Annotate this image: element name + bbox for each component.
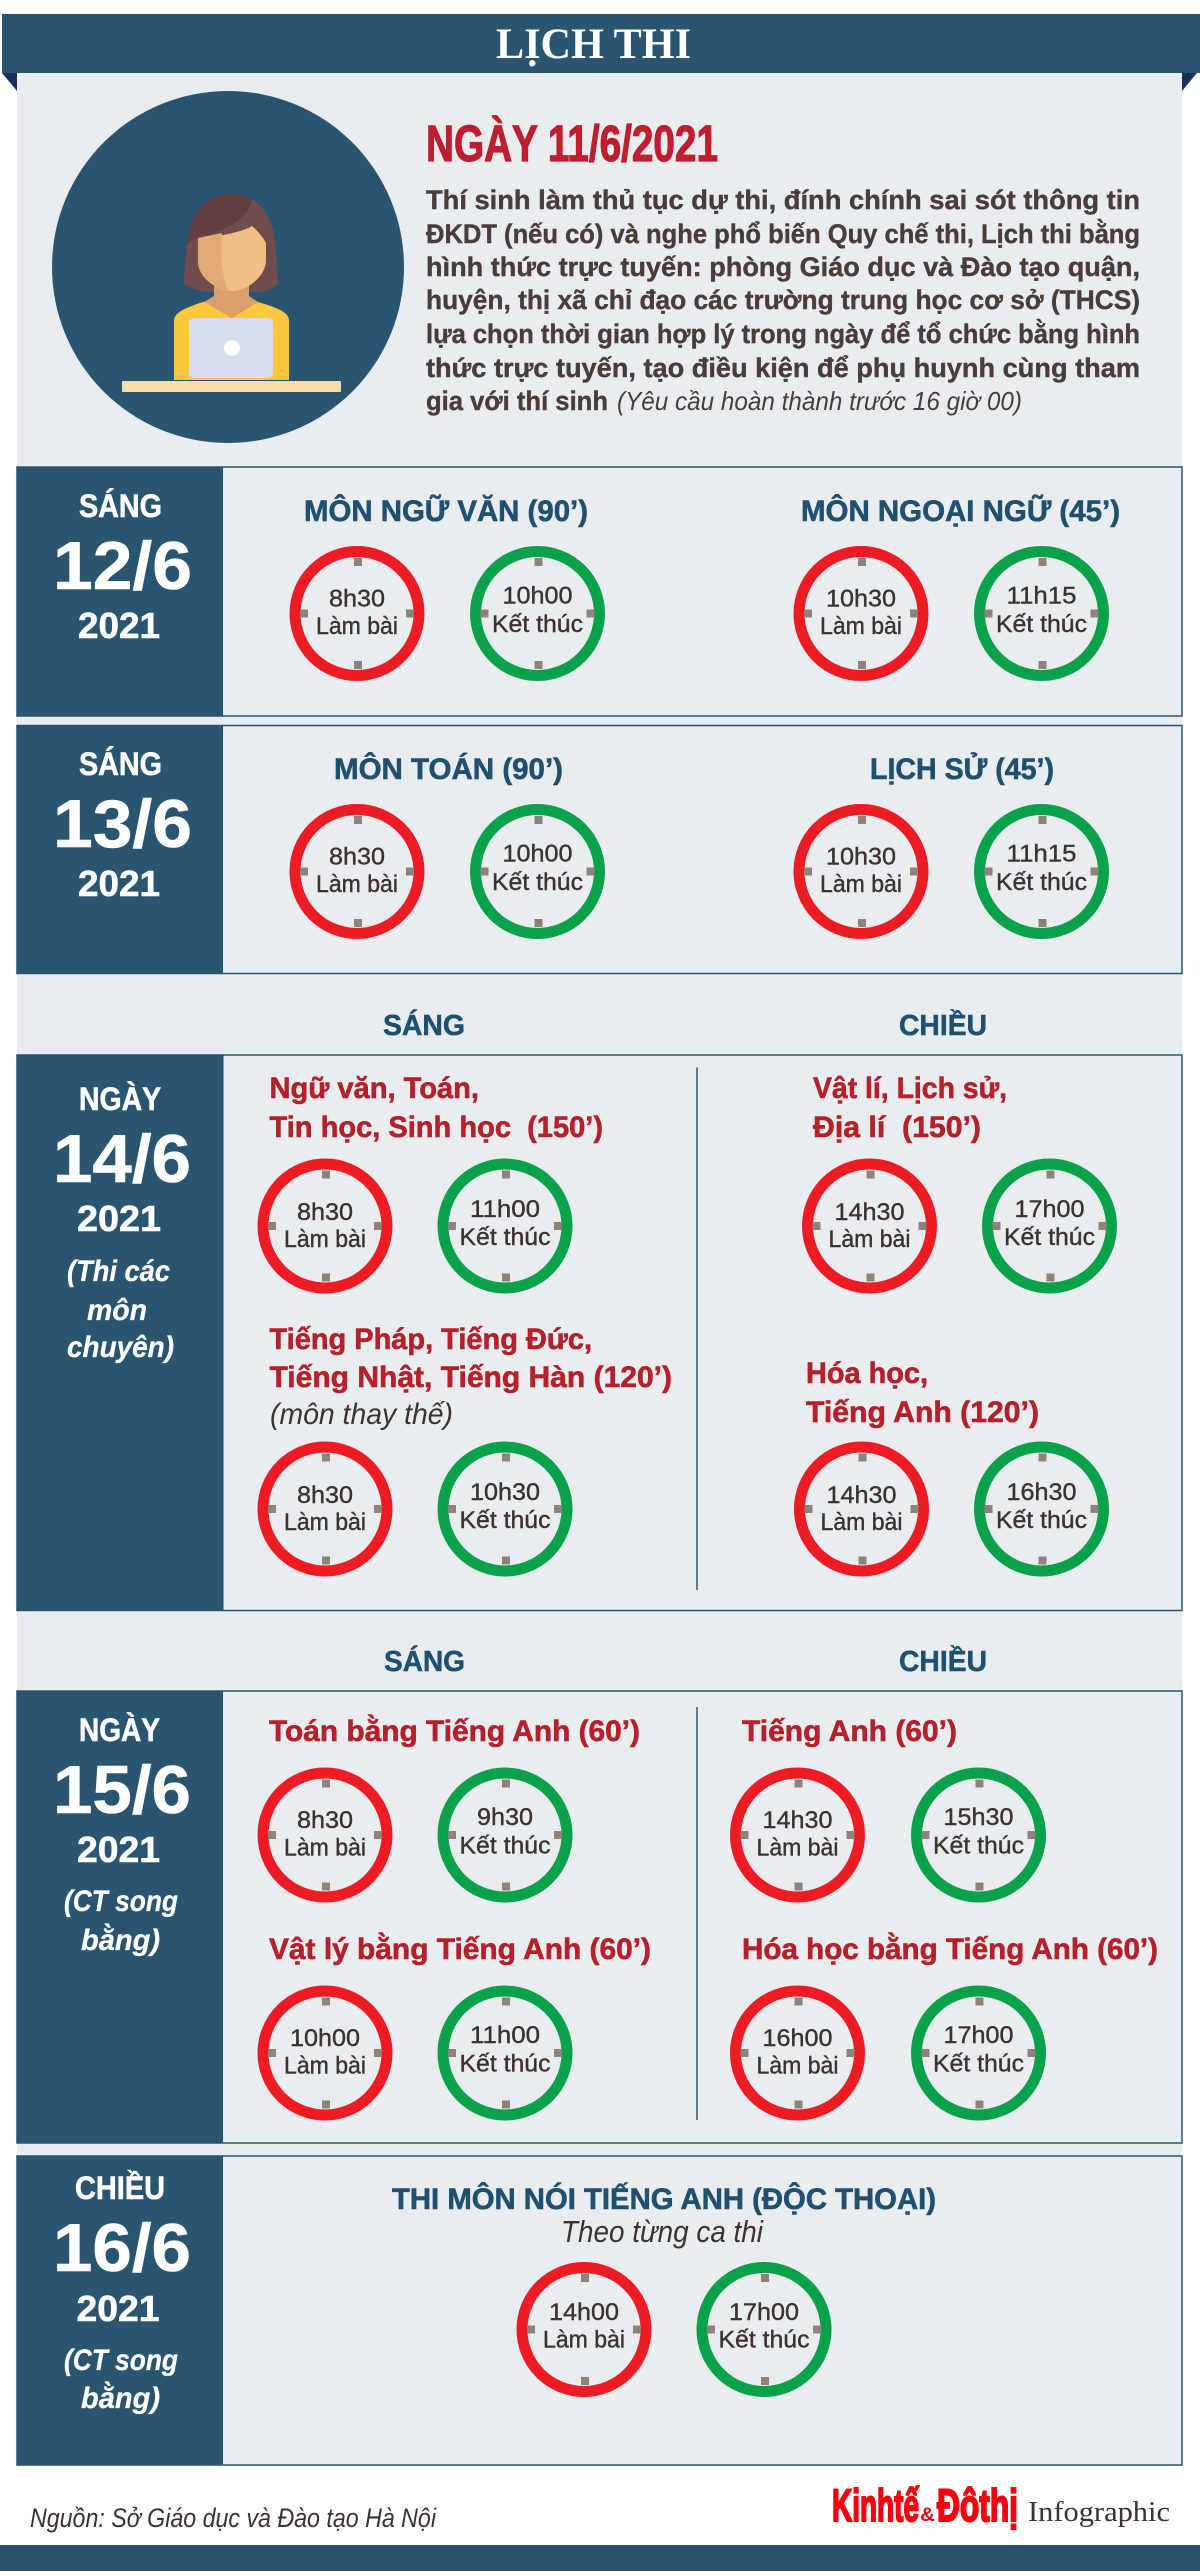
date block 15/6 [53, 1712, 191, 1957]
clock: end 10h30: 10h30 [470, 1479, 540, 1506]
logo: Kinhtế [832, 2480, 920, 2531]
clock: start 14h30: Làm bài [828, 1226, 910, 1253]
subject heading: Ngữ văn, Toán, [270, 1072, 479, 1105]
title banner: LỊCH THI [496, 21, 691, 68]
clock: start 10h30 [799, 552, 923, 676]
clock: end 11h00: Kết thúc [460, 2050, 550, 2078]
clock: end 15h30 [916, 1773, 1040, 1897]
clock: start 8h30 [295, 552, 419, 676]
date block 14/6: 2021 [77, 1198, 161, 1239]
clock: end 17h00: 17h00 [1014, 1196, 1084, 1223]
subject heading: Hóa học, [806, 1357, 928, 1390]
clock: start 10h30: Làm bài [820, 871, 902, 898]
clock: start 14h00 [522, 2268, 646, 2392]
clock: start 10h30: 10h30 [826, 586, 896, 612]
clock: end 17h00: Kết thúc [718, 2326, 810, 2354]
date block 14/6: (Thi các [67, 1255, 170, 1288]
subject heading: Vật lý bằng Tiếng Anh (60’) [269, 1932, 651, 1966]
intro paragraph: thức trực tuyến, tạo điều kiện để phụ huynh cùng tham [426, 353, 1140, 383]
clock: end 10h00: 10h00 [502, 840, 572, 868]
logo: Đôthị [937, 2480, 1018, 2531]
clock: start 8h30: 8h30 [297, 1199, 353, 1226]
date block 15/6: NGÀY [79, 1712, 160, 1748]
section label: afternoon: CHIỀU [899, 1008, 987, 1042]
clock: start 8h30: 8h30 [297, 1482, 353, 1509]
clock: start 14h30: Làm bài [820, 1509, 902, 1536]
clock: start 8h30: Làm bài [284, 1226, 366, 1253]
clock: start 8h30 [295, 810, 419, 934]
subject heading: Tiếng Pháp, Tiếng Đức, [270, 1323, 592, 1356]
intro paragraph: hình thức trực tuyến: phòng Giáo dục và Đào tạo quận, [426, 252, 1140, 282]
clock: start 14h30: 14h30 [826, 1482, 896, 1509]
footer band [0, 2545, 1200, 2571]
date block 14/6: môn [87, 1294, 147, 1327]
date block 15/6: (CT song [64, 1885, 178, 1918]
logo: & [920, 2505, 935, 2526]
panel: 13/6 [17, 726, 1182, 974]
intro paragraph: (Yêu cầu hoàn thành trước 16 giờ 00) [617, 386, 1022, 416]
intro paragraph: ĐKDT (nếu có) và nghe phổ biến Quy chế thi, Lịch thi bằng [426, 218, 1140, 249]
panel: 12/6 [17, 467, 1182, 716]
clock: end 11h00: 11h00 [470, 2022, 540, 2049]
clock: start 8h30: 8h30 [329, 844, 385, 870]
clock: end 17h00 [988, 1164, 1112, 1288]
date block 16/6: CHIỀU [75, 2170, 165, 2206]
clock: end 17h00: Kết thúc [1004, 1224, 1095, 1251]
clock: start 10h00: 10h00 [290, 2025, 360, 2052]
date block 12/6: 2021 [78, 605, 160, 646]
clock: start 14h30 [808, 1164, 932, 1288]
date block 16/6 [53, 2170, 191, 2415]
clock: end 17h00: 17h00 [729, 2299, 799, 2326]
date block 16/6: 16/6 [53, 2210, 191, 2286]
clock: start 16h00: Làm bài [756, 2052, 838, 2080]
logo [832, 2480, 1170, 2531]
clock: start 8h30: 8h30 [329, 586, 385, 612]
subject heading: LỊCH SỬ (45’) [870, 752, 1054, 786]
clock: start 8h30 [263, 1447, 387, 1571]
date block 12/6: 12/6 [53, 528, 192, 604]
section label: morning: SÁNG [383, 1008, 465, 1042]
clock: start 10h30: 10h30 [826, 844, 896, 870]
clock: start 14h30: 14h30 [762, 1807, 832, 1834]
clock: end 11h15 [980, 552, 1104, 676]
clock: end 11h00 [443, 1164, 567, 1288]
clock: end 15h30: 15h30 [944, 1804, 1014, 1831]
clock: start 8h30 [263, 1164, 387, 1288]
date block 13/6: SÁNG [79, 746, 162, 782]
subject heading [813, 1072, 1007, 1144]
subject heading: MÔN NGỮ VĂN (90’) [304, 494, 588, 528]
clock: end 11h15 [980, 810, 1104, 934]
date block 12/6: SÁNG [79, 488, 162, 524]
subject heading [270, 1072, 603, 1144]
source note: Nguồn: Sở Giáo dục và Đào tạo Hà Nội [30, 2503, 437, 2533]
clock: end 17h00: Kết thúc [933, 2050, 1024, 2078]
date block 14/6: chuyên) [67, 1331, 174, 1364]
panel: 15/6 [17, 1691, 1182, 2143]
clock: end 11h15: 11h15 [1006, 582, 1076, 610]
clock: end 16h30 [980, 1447, 1104, 1571]
date block 14/6 [53, 1081, 191, 1364]
date block 15/6: 15/6 [53, 1752, 191, 1828]
clock: start 8h30: Làm bài [316, 871, 398, 898]
clock: end 9h30 [443, 1773, 567, 1897]
title banner [2, 14, 1200, 91]
subject heading: Vật lí, Lịch sử, [813, 1072, 1007, 1105]
clock: end 11h15: Kết thúc [996, 869, 1087, 896]
date block 15/6: bằng) [81, 1923, 160, 1957]
clock: end 16h30: 16h30 [1006, 1479, 1076, 1506]
subject heading: Địa lí (150’) [813, 1111, 981, 1144]
clock: end 11h00 [443, 1991, 567, 2115]
subject heading: Tiếng Anh (60’) [742, 1715, 957, 1748]
date block 13/6 [53, 746, 192, 904]
date block 14/6: NGÀY [79, 1081, 161, 1117]
clock: start 10h30 [799, 810, 923, 934]
panel: 14/6 [17, 1055, 1182, 1610]
clock: end 10h00: Kết thúc [492, 611, 583, 638]
panel: 16/6 [17, 2156, 1182, 2465]
clock: end 11h00: 11h00 [470, 1196, 540, 1223]
clock: start 8h30 [263, 1773, 387, 1897]
heading: date 11/6/2021: NGÀY 11/6/2021 [426, 115, 718, 172]
subject heading: Toán bằng Tiếng Anh (60’) [269, 1714, 640, 1748]
clock: start 10h00 [263, 1991, 387, 2115]
clock: end 17h00 [916, 1991, 1040, 2115]
date block 13/6: 2021 [78, 863, 160, 904]
clock: end 11h15: 11h15 [1006, 840, 1076, 868]
clock: start 14h30 [800, 1447, 924, 1571]
subject heading: Tin học, Sinh học (150’) [270, 1111, 603, 1144]
clock: start 14h30: 14h30 [834, 1199, 904, 1226]
clock: start 8h30: 8h30 [297, 1807, 353, 1834]
intro paragraph: lựa chọn thời gian hợp lý trong ngày để tổ chức bằng hình [426, 318, 1140, 349]
subject heading: Tiếng Anh (120’) [806, 1396, 1039, 1429]
icon: student at laptop [52, 91, 404, 443]
clock: start 8h30: Làm bài [316, 613, 398, 640]
clock: end 10h30 [443, 1447, 567, 1571]
clock: start 14h00: 14h00 [549, 2299, 619, 2326]
clock: start 8h30: Làm bài [284, 1509, 366, 1536]
subject heading: MÔN TOÁN (90’) [334, 752, 563, 786]
subject heading: MÔN NGOẠI NGỮ (45’) [801, 494, 1120, 528]
clock: start 10h30: Làm bài [820, 613, 902, 640]
subject heading [270, 1323, 672, 1431]
clock: start 10h00: Làm bài [284, 2052, 366, 2080]
intro paragraph [426, 185, 1140, 416]
subject heading: Tiếng Nhật, Tiếng Hàn (120’) [270, 1361, 672, 1394]
clock: end 16h30: Kết thúc [996, 1507, 1087, 1534]
clock: end 10h30: Kết thúc [460, 1507, 550, 1534]
clock: start 14h00: Làm bài [543, 2326, 625, 2354]
date block 16/6: 2021 [76, 2288, 160, 2329]
subject heading [806, 1357, 1039, 1429]
clock: end 10h00: 10h00 [502, 582, 572, 610]
clock: start 14h30: Làm bài [756, 1834, 838, 1862]
subtitle: Theo từng ca thi [561, 2214, 764, 2249]
clock: end 15h30: Kết thúc [933, 1832, 1024, 1860]
section label: morning: SÁNG [384, 1644, 465, 1678]
subject heading: (môn thay thế) [270, 1398, 453, 1431]
clock: end 10h00 [476, 810, 600, 934]
date block 16/6: (CT song [64, 2344, 178, 2377]
clock: end 9h30: 9h30 [477, 1804, 533, 1831]
intro paragraph: gia với thí sinh [426, 386, 608, 416]
clock: end 11h15: Kết thúc [996, 611, 1087, 638]
intro paragraph: huyện, thị xã chỉ đạo các trường trung học cơ sở (THCS) [426, 285, 1140, 315]
subject heading: Hóa học bằng Tiếng Anh (60’) [742, 1932, 1158, 1966]
clock: start 14h30 [736, 1773, 860, 1897]
date block 12/6 [53, 488, 192, 646]
clock: start 8h30: Làm bài [284, 1834, 366, 1862]
clock: end 17h00: 17h00 [944, 2022, 1014, 2049]
clock: end 10h00: Kết thúc [492, 869, 583, 896]
subject heading: THI MÔN NÓI TIẾNG ANH (ĐỘC THOẠI) [392, 2182, 936, 2216]
clock: end 17h00 [702, 2268, 826, 2392]
clock: start 16h00 [736, 1991, 860, 2115]
clock: end 10h00 [476, 552, 600, 676]
intro paragraph: Thí sinh làm thủ tục dự thi, đính chính sai sót thông tin [426, 185, 1140, 215]
date block 13/6: 13/6 [53, 786, 192, 862]
date block 14/6: 14/6 [53, 1121, 191, 1197]
logo: Infographic [1028, 2496, 1170, 2528]
date block 15/6: 2021 [77, 1829, 160, 1870]
clock: start 16h00: 16h00 [762, 2025, 832, 2052]
section label: afternoon: CHIỀU [899, 1644, 987, 1678]
date block 16/6: bằng) [81, 2381, 160, 2415]
clock: end 11h00: Kết thúc [460, 1224, 550, 1251]
clock: end 9h30: Kết thúc [460, 1832, 550, 1860]
